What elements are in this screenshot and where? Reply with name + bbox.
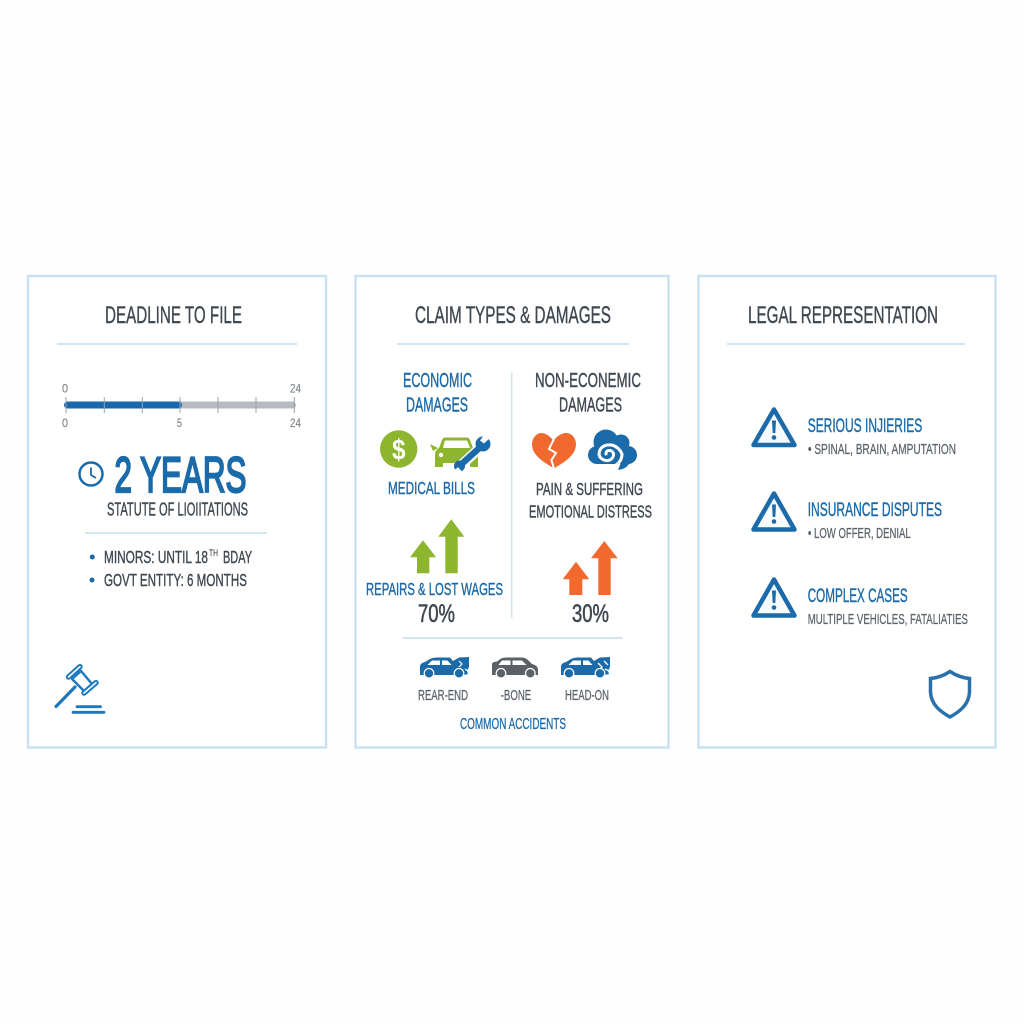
- icon: dollar coin: [380, 430, 417, 468]
- item: insurance disputes: INSURANCE DISPUTES: [808, 500, 942, 521]
- label: head-on: HEAD-ON: [565, 688, 609, 704]
- label: common accidents: COMMON ACCIDENTS: [460, 716, 566, 733]
- bullet list: TH: [209, 548, 218, 558]
- timeline chart: [62, 382, 301, 430]
- item: serious injuries: [754, 410, 956, 458]
- icon: rear-end car: [420, 657, 469, 678]
- icon: green arrows: [410, 519, 464, 573]
- panel: deadline to file: [28, 276, 326, 748]
- icon: t-bone car: [492, 658, 538, 678]
- label: medical bills: MEDICAL BILLS: [388, 478, 475, 498]
- column: non-economic damages heading: DAMAGES: [559, 394, 622, 416]
- label: repairs and lost wages: REPAIRS & LOST WAGES: [366, 579, 503, 599]
- item: serious injuries: • SPINAL, BRAIN, AMPUTATION: [808, 442, 956, 458]
- column: non-economic damages heading: [535, 370, 641, 416]
- stat: 30 percent: 30%: [572, 600, 609, 628]
- heading: deadline to file: DEADLINE TO FILE: [105, 302, 242, 329]
- label: t-bone: -BONE: [501, 688, 531, 704]
- label: pain and suffering, emotional distress: PAIN & SUFFERING: [536, 479, 643, 499]
- icon: orange arrows: [563, 541, 618, 595]
- timeline chart: 5: [177, 416, 182, 430]
- item: insurance disputes: • LOW OFFER, DENIAL: [808, 526, 911, 542]
- item: complex cases: [754, 580, 968, 628]
- icon: shield: [930, 672, 970, 717]
- column: non-economic damages heading: NON-ECONEMIC: [535, 370, 641, 392]
- icon: storm cloud: [588, 430, 637, 470]
- timeline chart: 24: [290, 382, 301, 396]
- column: economic damages heading: ECONOMIC: [403, 370, 472, 392]
- bullet list: MINORS: UNTIL 18: [104, 547, 208, 567]
- label: pain and suffering, emotional distress: EMOTIONAL DISTRESS: [529, 502, 652, 522]
- timeline chart: 24: [290, 416, 301, 430]
- item: serious injuries: SERIOUS INJIERIES: [808, 416, 922, 437]
- panel: claim types and damages: [356, 276, 668, 748]
- heading: claim types and damages: CLAIM TYPES & DAMAGES: [415, 302, 611, 329]
- column: economic damages heading: [403, 370, 472, 416]
- icon: head-on car: [561, 657, 610, 678]
- icon: car with wrench: [430, 433, 492, 473]
- timeline chart: 0: [62, 382, 68, 396]
- bullet list: [90, 547, 252, 590]
- icon: dollar coin: $: [392, 434, 406, 466]
- item: complex cases: COMPLEX CASES: [808, 586, 908, 607]
- icon: gavel: [56, 667, 104, 712]
- item: insurance disputes: [754, 494, 942, 542]
- label: pain and suffering, emotional distress: [529, 479, 652, 522]
- icon: clock: [80, 462, 102, 486]
- bullet list: GOVT ENTITY: 6 MONTHS: [104, 570, 247, 590]
- column: economic damages heading: DAMAGES: [406, 394, 468, 416]
- label: rear-end: REAR-END: [418, 688, 468, 704]
- stat: 70 percent: 70%: [418, 600, 455, 628]
- bullet list: BDAY: [223, 547, 252, 567]
- big stat: 2 years: 2 YEARS: [114, 447, 246, 503]
- panel: legal representation: [698, 276, 996, 748]
- timeline chart: 0: [62, 416, 68, 430]
- subtitle: statute of limitations: STATUTE OF LIOIITATIONS: [107, 500, 248, 520]
- icon: broken heart: [532, 433, 576, 469]
